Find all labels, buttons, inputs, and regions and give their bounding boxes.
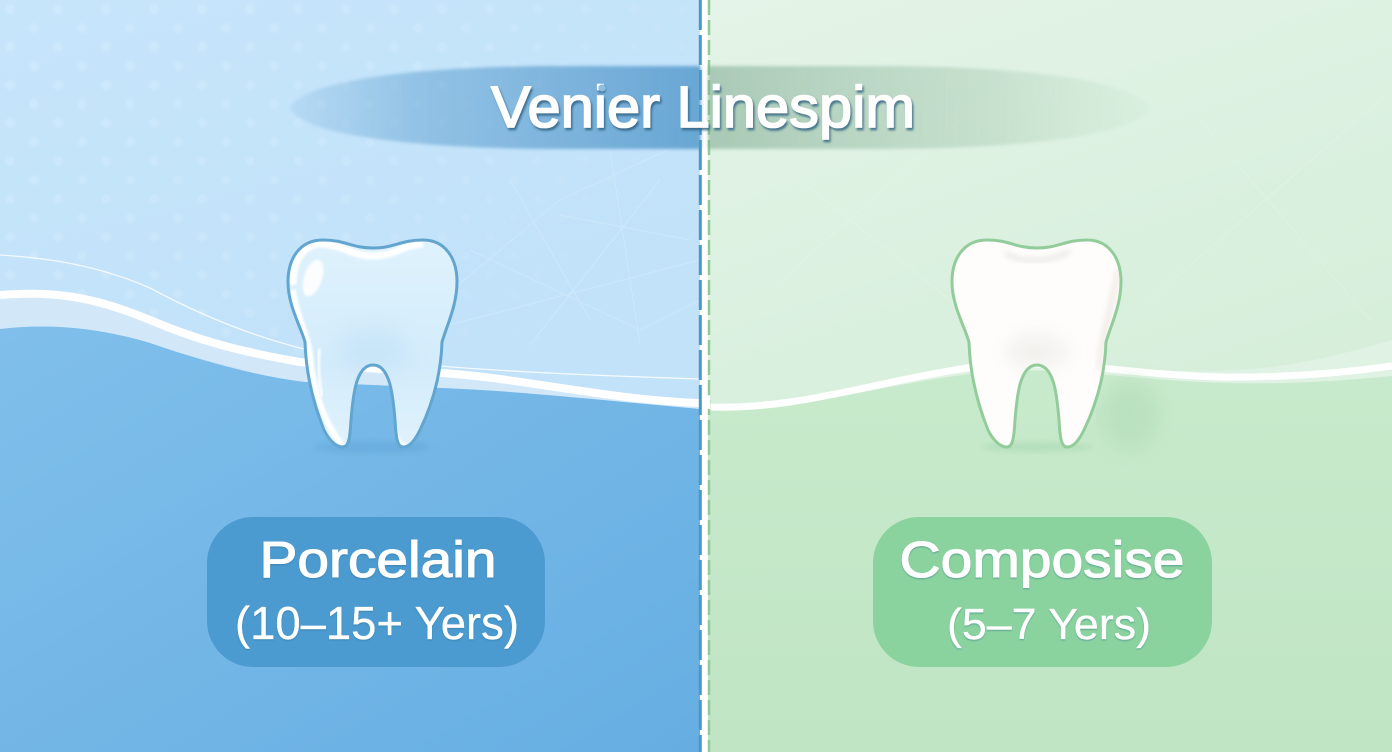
composite heading: Composise [900, 531, 1184, 588]
panel: composite background [708, 0, 1392, 752]
porcelain heading: Porcelain [260, 531, 496, 588]
title text: Venier Linespim [491, 75, 915, 140]
panel: porcelain label [207, 517, 545, 667]
title banner [290, 66, 1150, 149]
porcelain lifespan: (10–15+ Yers) [235, 597, 519, 649]
icon: porcelain tooth [288, 240, 457, 453]
composite lifespan: (5–7 Yers) [947, 600, 1151, 649]
icon: composite tooth [952, 240, 1160, 452]
center divider [700, 0, 710, 752]
panel: composite label [873, 517, 1212, 667]
panel: porcelain background [0, 0, 700, 752]
